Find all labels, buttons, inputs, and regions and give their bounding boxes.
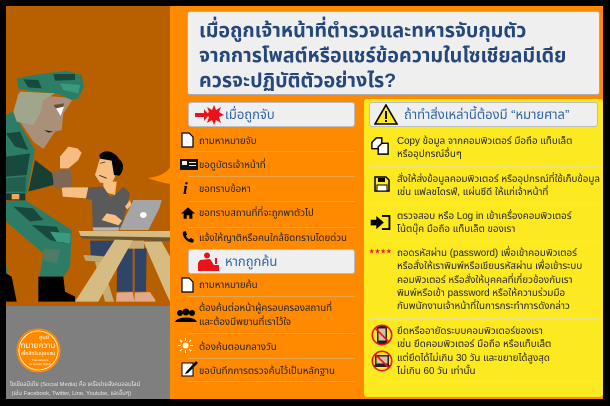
man's raised hand [60, 147, 82, 168]
soldier beret [17, 71, 84, 100]
item: log in: โน้ตบุ๊ค มือถือ แท็บเล็ต ของเรา [397, 224, 515, 235]
item: log in [397, 209, 572, 235]
item: decrypt password: คอมพิวเตอร์ หรือสั่งให้บุคคลที่เกี่ยวข้องกับเรา [397, 275, 573, 286]
heading: when arrested: เมื่อถูกจับ [225, 107, 275, 122]
panel: main orange background [170, 6, 603, 399]
icon: document [181, 132, 194, 148]
soldier fist [52, 168, 72, 189]
item: seize devices [396, 326, 551, 377]
icon: no laptop [372, 350, 392, 372]
panel: when arrested [180, 102, 355, 244]
item: seize devices: เช่น ยึดคอมพิวเตอร์ มือถือ หรือแท็บเล็ต [397, 339, 551, 350]
item: ask for search warrant: ถามหาหมายค้น [199, 280, 258, 290]
footnote text: โซเชียลมีเดีย (Social Media) คือ เครือข่ายสังคมออนไลน์ [10, 382, 140, 388]
item: seize devices: ไม่เกิน 60 วัน เท่านั้น [397, 366, 476, 377]
title: เมื่อถูกเจ้าหน้าที่ตำรวจและทหารจับกุมตัว [199, 20, 526, 42]
item: search in daytime: ต้องค้นตอนกลางวัน [199, 342, 277, 352]
item: decrypt password: หรือสั่งให้เราพิมพ์หรือเขียนรหัสผ่าน เพื่อเข้าระบบ [397, 261, 582, 272]
man's head [95, 151, 123, 183]
item: ask for warrant: ถามหาหมายจับ [199, 136, 257, 147]
title box [187, 11, 600, 95]
panel: illustration background [6, 6, 170, 306]
man's trousers [90, 241, 147, 292]
item: decrypt password: พิมพ์หรือเข้า password หรือให้ความร่วมมือ [397, 288, 565, 299]
item: copy data: หรืออุปกรณ์อื่นๆ [397, 149, 462, 160]
item: copy data [397, 136, 572, 160]
icon: floppy disk [374, 176, 390, 192]
heading: when searched: หากถูกค้น [225, 254, 277, 269]
icon: people [175, 308, 197, 322]
item: log in: ตรวจสอบ หรือ Log in เข้าเครื่องคอมพิวเตอร์ [397, 211, 572, 222]
table rear leg and stool [83, 255, 114, 302]
logo: orange circle: for Human Rights [29, 362, 51, 366]
item: search before occupant: ต้องค้นต่อหน้าผู้ครอบครองสถานที่ [199, 303, 332, 314]
soldier sleeve [28, 160, 53, 192]
item: seize devices: ยึดหรืออายัดระบบคอมพิวเตอร์ของเรา [397, 326, 543, 337]
item: search before occupant [199, 301, 332, 328]
panel: grey footer [6, 306, 170, 399]
item: ask for charges: ขอทราบข้อหา [199, 184, 251, 195]
panel: when searched [175, 249, 355, 382]
soldier head [13, 92, 73, 149]
footnote text: (เช่น Facebook, Twitter, Line, Youtube, และอื่นๆ) [12, 391, 131, 397]
item: send data storage: เช่น แฟลชไดรฟ์, แผ่นซีดี ให้แก่เจ้าหน้าที่ [397, 187, 548, 198]
logo: orange circle: Thai Lawyers [32, 358, 49, 362]
man's shoes [116, 292, 155, 302]
illustration: soldier and arrested man [6, 70, 170, 302]
icon: password stars: ★★★★ [369, 249, 392, 255]
item: ask for ID: ขอดูบัตรเจ้าหน้าที่ [199, 160, 266, 170]
heading: court warrant: ถ้าทำสิ่งเหล่านี้ต้องมี “หมายศาล” [404, 107, 569, 122]
soldier legs [6, 200, 72, 277]
icon: sun [178, 338, 193, 353]
panel: court warrant required [364, 99, 603, 397]
item: copy data: Copy ข้อมูล จากคอมพิวเตอร์ มือถือ แท็บเล็ต [397, 136, 572, 147]
heading: court warrant [369, 102, 598, 127]
logo: orange circle: ศูนย์ [39, 335, 49, 341]
item: decrypt password: กับพนักงานเจ้าหน้าที่ในการกระทำการดังกล่าว [397, 301, 570, 312]
item: record search: ขอบันทึกการตรวจค้นไว้เป็นหลักฐาน [199, 366, 335, 376]
item: decrypt password: ถอดรหัสผ่าน (password) เพื่อเข้าคอมพิวเตอร์ [397, 248, 577, 259]
item: ask for destination: ขอทราบสถานที่ที่จะถูกพาตัวไป [199, 208, 314, 218]
title [199, 16, 566, 92]
logo: orange circle: ทนายความ [21, 341, 55, 350]
icon: log in [370, 215, 390, 230]
icon: document [181, 277, 194, 293]
laptop [119, 200, 162, 230]
speech bubble tail [148, 168, 170, 184]
heading: when searched [188, 249, 355, 274]
soldier boots [6, 273, 75, 302]
item: seize devices: แต่ยึดได้ไม่เกิน 30 วัน และขยายได้สูงสุด [397, 353, 550, 364]
table [75, 231, 170, 302]
item: notify relatives: แจ้งให้ญาติหรือคนใกล้ชิดทราบโดยด่วน [199, 232, 347, 244]
item: send data storage [397, 172, 600, 198]
footnote text [10, 380, 140, 397]
title: จากการโพสต์หรือแชร์ข้อความในโซเชียลมีเดีย [199, 45, 566, 67]
icon: ID card [180, 159, 198, 170]
item: search before occupant: และต้องมีพยานที่เราไว้ใจ [199, 316, 291, 328]
logo: orange circle: เพื่อสิทธิมนุษยชน [21, 349, 55, 357]
man's arm and shirt [62, 182, 131, 231]
man's hand on lap [102, 213, 122, 225]
item: send data storage: สั่งให้ส่งข้อมูลคอมพิวเตอร์ หรืออุปกรณ์ที่ใช้เก็บข้อมูล [397, 174, 600, 185]
icon: phone [182, 231, 194, 243]
icon: home [181, 207, 195, 219]
heading: when arrested [188, 102, 355, 127]
title: ควรจะปฏิบัติตัวอย่างไร? [199, 70, 396, 92]
icon: note and pen [182, 361, 198, 376]
icon: info: i [183, 179, 188, 198]
soldier torso [6, 112, 35, 200]
icon: no phone [372, 324, 392, 346]
item: decrypt password [397, 246, 582, 312]
icon: copy [371, 137, 389, 155]
logo: orange circle [16, 328, 60, 372]
